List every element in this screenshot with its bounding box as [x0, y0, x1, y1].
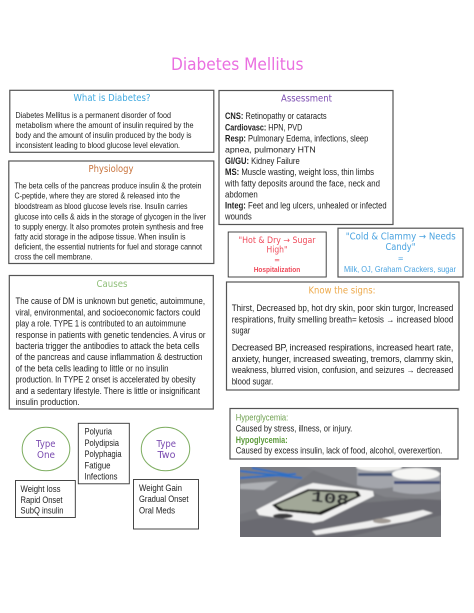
symptoms box: Polydipsia — [84, 438, 119, 448]
text: signs: Thirst, Decreased bp, hot dry skin, poor skin turgor, Increased — [232, 303, 453, 313]
text: causes: of the beta cells leading to little or no insulin — [16, 364, 168, 374]
text: definition — [16, 110, 194, 150]
icon: blue lancets — [240, 468, 302, 478]
panel: hyper and hypoglycemia: Caused by excess insulin, lack of food, alcohol, overexertion. — [236, 446, 442, 456]
callout: cold and clammy: Candy" — [386, 242, 416, 253]
callout: hot and dry: Hospitalization — [254, 265, 301, 274]
panel: hyper and hypoglycemia: Caused by stress, illness, or injury. — [236, 424, 352, 434]
icon: test strip — [312, 510, 433, 535]
type one traits box: SubQ insulin — [20, 506, 64, 516]
text: signs: respirations, fruity smelling breath= ketosis → increased blood — [232, 314, 453, 324]
text: assessment list: abdomen — [225, 189, 258, 199]
symptoms box: Polyphagia — [84, 449, 122, 459]
text: assessment list: GI/GU: Kidney Failure — [225, 156, 300, 166]
panel: physiology — [9, 161, 214, 264]
type two circle: Two — [156, 450, 176, 461]
text: assessment list: Cardiovasc: HPN, PVD — [225, 122, 302, 132]
type one circle — [22, 427, 70, 471]
text: causes: The cause of DM is unknown but genetic, autoimmune, — [16, 296, 205, 306]
title: Diabetes Mellitus — [171, 55, 304, 75]
text: definition: metabolism where the amount of insulin required by the — [16, 120, 194, 130]
text: signs — [231, 303, 453, 387]
text: physiology: deficient, the essential nutrients for fuel and storage cannot — [14, 242, 203, 252]
text: assessment list: with fatty deposits around the face, neck and — [224, 178, 380, 188]
heading: physiology: Physiology — [88, 164, 134, 175]
text: signs: blood sugar. — [232, 377, 273, 387]
heading: what is diabetes: What is Diabetes? — [74, 93, 150, 104]
symptoms box — [78, 423, 129, 484]
text: physiology: C-peptide, where they are stored & released into the — [14, 191, 180, 201]
text: signs: sugar — [232, 326, 250, 336]
text: causes: viral, environmental, and socioeconomic factors could — [16, 308, 200, 318]
text: signs: anxiety, hunger, increased sweating, tremors, clammy skin, — [232, 354, 453, 364]
text: causes: play a role. TYPE 1 is contributed to an autoimmune — [16, 318, 186, 328]
type two circle — [141, 427, 190, 471]
panel: causes — [9, 276, 213, 409]
icon: test strip vials — [356, 463, 440, 494]
icon: glucose meter — [256, 483, 374, 523]
text: signs: Decreased BP, increased respirations, increased heart rate, — [232, 343, 453, 353]
type two traits box: Gradual Onset — [139, 494, 189, 504]
callout: hot and dry: = — [274, 256, 280, 264]
text: physiology: The beta cells of the pancreas produce insulin & the protein — [14, 180, 202, 190]
text: causes — [16, 296, 206, 407]
symptoms box: Fatigue — [84, 460, 111, 470]
panel: hyper and hypoglycemia — [230, 408, 458, 459]
callout: cold and clammy: Milk, OJ, Graham Crackers, sugar — [344, 264, 456, 274]
callout: hot and dry — [228, 232, 326, 277]
text: causes: of the pancreas and cause inflammation & destruction — [16, 352, 202, 362]
text: causes: response in patients with genetic tendencies. A virus or — [16, 330, 206, 340]
text: physiology: cross the cell membrane. — [14, 252, 92, 262]
type two traits box — [134, 480, 198, 529]
heading: know the signs: Know the signs: — [308, 286, 376, 296]
text: assessment list: wounds — [224, 212, 252, 222]
text: signs: weakness, blurred vision, confusion, and seizures → decreased — [231, 365, 453, 375]
callout: cold and clammy: = — [398, 255, 404, 263]
icon: glucose meter: 108 — [310, 489, 350, 510]
text: physiology: bloodstream as blood glucose levels rise. Insulin carries — [14, 201, 188, 211]
text: causes: insulin production. — [16, 397, 80, 407]
text: physiology: fatty acid storage in the adipose tissue. When insulin is — [14, 231, 186, 241]
callout: cold and clammy: "Cold & Clammy → Needs — [346, 232, 456, 242]
type two circle: Type — [156, 439, 176, 450]
heading: causes: Causes — [96, 279, 128, 290]
type one traits box — [16, 480, 75, 518]
text: physiology — [14, 180, 206, 262]
type two traits box: Weight Gain — [139, 483, 182, 493]
text: definition: body and the amount of insulin produced by the body is — [16, 130, 192, 140]
type one circle: Type — [35, 439, 56, 450]
text: assessment list — [224, 111, 387, 222]
text: assessment list: MS: Muscle wasting, weight loss, thin limbs — [225, 167, 375, 177]
callout: cold and clammy — [338, 228, 463, 277]
panel: assessment — [219, 90, 393, 224]
text: physiology: glucose into cells & aids in the storage of glycogen in the liver — [14, 211, 206, 221]
callout: hot and dry: High" — [266, 246, 288, 256]
type one circle: One — [37, 450, 55, 461]
heading: assessment: Assessment — [281, 94, 332, 104]
text: physiology: to supply energy. It also promotes protein synthesis and free — [14, 221, 204, 231]
type one traits box: Rapid Onset — [20, 495, 63, 505]
symptoms box: Polyuria — [84, 426, 112, 436]
text: causes: production. In TYPE 2 onset is accelerated by obesity — [16, 374, 196, 384]
text: definition: Diabetes Mellitus is a permanent disorder of food — [16, 110, 171, 120]
type one traits box: Weight loss — [20, 484, 61, 494]
symptoms box: Infections — [84, 472, 118, 482]
text: causes: and a sedentary lifestyle. There is little or insignificant — [16, 386, 200, 396]
text: assessment list: Resp: Pulmonary Edema, infections, sleep — [225, 134, 368, 144]
callout: hot and dry: "Hot & Dry → Sugar — [238, 236, 316, 246]
panel: hyper and hypoglycemia: Hypoglycemia: — [236, 435, 288, 445]
text: assessment list: apnea, pulmonary HTN — [225, 146, 316, 155]
photo: glucose meter and test strip — [238, 463, 443, 539]
panel: know the signs — [226, 282, 459, 390]
panel: what is diabetes — [10, 90, 214, 152]
type two traits box: Oral Meds — [139, 506, 176, 516]
text: assessment list: CNS: Retinopathy or cataracts — [225, 111, 327, 121]
text: assessment list: Integ: Feet and leg ulcers, unhealed or infected — [225, 201, 387, 211]
panel: hyper and hypoglycemia: Hyperglycemia: — [236, 412, 288, 422]
text: definition: inconsistent leading to blood glucose level elevation. — [16, 140, 180, 150]
text: causes: bacteria trigger the antibodies to attack the beta cells — [16, 341, 200, 351]
